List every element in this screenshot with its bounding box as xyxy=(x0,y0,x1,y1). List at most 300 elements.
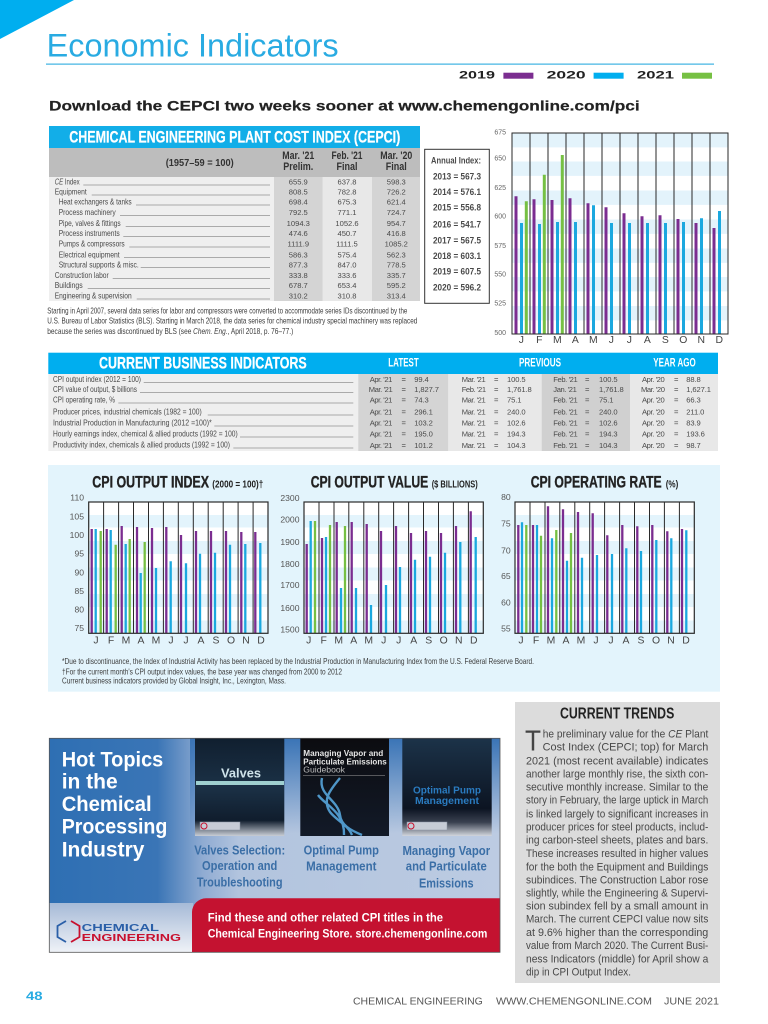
x axis: operating rate: J xyxy=(593,635,599,646)
CEPCI row labels xyxy=(55,176,270,301)
CEPCI Mar 20 values: 562.3 xyxy=(387,250,406,259)
CEPCI y axis: 550 xyxy=(494,272,506,279)
CEPCI Mar 21 values: 1111.9 xyxy=(288,240,309,249)
CBI previous column 2: = xyxy=(585,385,590,394)
corner triangle xyxy=(0,0,74,39)
CBI previous column 1: Mar. '21 xyxy=(462,375,485,384)
CBI previous column 1: 104.3 xyxy=(507,441,526,450)
y axis: output value: 1900 xyxy=(280,537,300,547)
CEPCI Mar 21 values: 586.3 xyxy=(289,250,308,259)
panel: current trends xyxy=(515,702,720,983)
heading: CPI operating rate: (%) xyxy=(666,480,678,491)
book: valves: Valves xyxy=(221,766,261,781)
CBI previous column 2: Feb. '21 xyxy=(553,375,577,384)
CBI previous column 2: Jan. '21 xyxy=(553,385,577,394)
CBI previous column 1: 75.1 xyxy=(507,396,521,405)
x axis: operating rate: N xyxy=(667,635,675,646)
CEPCI Feb 21 values: 771.1 xyxy=(337,208,357,217)
current trends body: ing carbon-steel sheets, plates and bars. xyxy=(526,835,708,847)
CEPCI y axis: 575 xyxy=(494,243,506,250)
CBI previous column 1: = xyxy=(494,396,499,405)
CBI previous column 2: 194.3 xyxy=(599,430,618,439)
y axis: output index: 100 xyxy=(70,530,84,540)
CBI year ago column: Apr. '20 xyxy=(642,418,664,428)
book titles: Operation and xyxy=(202,859,277,873)
CEPCI row labels: CE Index xyxy=(55,176,80,186)
panel: CEPCI table xyxy=(49,126,420,301)
CBI year ago column: 193.6 xyxy=(686,430,705,439)
red store banner: Find these and other related CPI titles in the xyxy=(208,912,444,925)
x axis: output value: J xyxy=(396,635,401,646)
book titles: and Particulate xyxy=(406,860,487,874)
CEPCI Feb 21 values: 782.8 xyxy=(337,187,357,196)
CEPCI heading: CHEMICAL ENGINEERING PLANT COST INDEX (CEPCI) xyxy=(69,128,400,147)
CBI previous column 2: = xyxy=(585,441,590,450)
CBI year ago column: Apr. '20 xyxy=(642,408,664,416)
book titles: Troubleshooting xyxy=(197,876,283,890)
CBI previous column 1: 102.6 xyxy=(507,418,526,428)
y axis: output value: 2000 xyxy=(280,515,300,525)
CBI previous column 1: 240.0 xyxy=(507,408,526,416)
CBI year ago column: = xyxy=(674,396,679,405)
x axis: output value: N xyxy=(455,635,462,646)
CEPCI Mar 21 values: 474.6 xyxy=(289,229,308,238)
book titles: Optimal Pump xyxy=(304,843,379,857)
book: vapor and particulate emissions: Managing Vapor and xyxy=(303,748,383,758)
annual index box: 2016 = 541.7 xyxy=(433,219,481,229)
y axis: output value xyxy=(280,493,300,635)
CBI year ago column: Apr. '20 xyxy=(642,396,664,405)
CEPCI Mar 20 values xyxy=(385,178,408,301)
CBI previous column 2: = xyxy=(585,408,590,416)
ad headline: Hot Topics xyxy=(62,749,163,772)
CEPCI Mar 21 values: 333.8 xyxy=(289,271,308,280)
current trends body: slightly, while the Engineering & Supervi- xyxy=(526,888,709,900)
CEPCI Feb 21 values: 1111.5 xyxy=(336,240,358,249)
CBI latest column: Mar. '21 xyxy=(369,385,392,394)
CBI previous column 1 xyxy=(462,375,532,450)
CEPCI column header xyxy=(49,148,420,177)
CEPCI Mar 21 values xyxy=(287,178,310,301)
chart: CPI operating rate xyxy=(501,473,694,646)
CBI previous column 2 xyxy=(553,375,624,450)
CBI year ago column: = xyxy=(674,375,679,384)
x axis: output index: A xyxy=(138,635,145,646)
CBI year ago column: Mar. '20 xyxy=(641,385,665,394)
CEPCI Mar 21 values: 310.2 xyxy=(289,292,308,301)
CBI year ago column: 211.0 xyxy=(686,408,704,416)
CBI previous column 1: = xyxy=(494,385,499,394)
CEPCI Feb 21 values: 450.7 xyxy=(337,229,357,238)
x axis: output value: D xyxy=(470,635,477,646)
current trends body: producer prices for steel products, includ- xyxy=(526,821,709,833)
CBI year ago column: = xyxy=(674,441,679,450)
CBI year ago column: Apr. '20 xyxy=(642,441,664,450)
CEPCI x axis: J xyxy=(609,335,614,346)
CBI heading: CURRENT BUSINESS INDICATORS xyxy=(99,353,307,372)
y axis: output index: 80 xyxy=(74,605,84,615)
CBI year ago column: 66.3 xyxy=(686,396,701,405)
CBI year ago column xyxy=(641,375,711,450)
CBI latest column: 1,827.7 xyxy=(414,385,439,394)
CEPCI x axis: O xyxy=(679,335,687,346)
y axis: output value: 2300 xyxy=(280,493,300,503)
y axis: output value: 1700 xyxy=(280,580,300,590)
CEPCI row labels: Construction labor xyxy=(55,270,109,280)
CBI previous column 1: = xyxy=(494,441,499,450)
current trends body: value from March 2020. The Current Busi- xyxy=(526,940,709,952)
annual index box: 2015 = 556.8 xyxy=(433,203,481,213)
CEPCI y axis xyxy=(494,130,506,337)
current trends body xyxy=(526,729,709,978)
CBI previous column 2: 1,761.8 xyxy=(599,385,624,394)
CEPCI x axis: N xyxy=(698,335,705,346)
current trends body: ness Indicators (middle) for April show a xyxy=(526,953,708,965)
CEPCI column header: Final xyxy=(336,161,358,173)
CBI row labels xyxy=(53,374,353,449)
CBI heading: YEAR AGO xyxy=(653,358,696,370)
CBI latest column: Apr. '21 xyxy=(370,396,392,405)
x axis: output index: D xyxy=(257,635,265,646)
CEPCI column header: Feb. '21 xyxy=(332,150,362,162)
CEPCI Feb 21 values xyxy=(335,178,359,301)
CBI latest column: = xyxy=(402,441,406,450)
ad headline: Industry xyxy=(62,839,145,862)
CEPCI column header: Mar. '20 xyxy=(380,150,412,162)
CBI previous column 1: 100.5 xyxy=(507,375,526,384)
CBI latest column: = xyxy=(402,396,406,405)
x axis: output index: M xyxy=(122,635,130,646)
CBI previous column 1: Mar. '21 xyxy=(462,396,485,405)
CBI row labels: Productivity index, chemicals & allied products (1992 = 100) xyxy=(53,439,230,449)
CEPCI row labels: Heat exchangers & tanks xyxy=(59,196,132,206)
CEPCI row labels: Structural supports & misc. xyxy=(59,259,139,269)
CEPCI y axis: 675 xyxy=(494,130,506,136)
CBI previous column 1: 194.3 xyxy=(507,430,526,439)
CBI previous column 2: 240.0 xyxy=(599,408,618,416)
CEPCI Feb 21 values: 575.4 xyxy=(337,250,357,259)
chart: CPI output value xyxy=(280,473,483,646)
CEPCI y axis: 600 xyxy=(494,214,506,221)
heading: CPI output index: CPI OUTPUT INDEX xyxy=(92,473,209,492)
book: vapor and particulate emissions xyxy=(300,738,389,836)
Chemical Engineering logo xyxy=(58,921,181,944)
CEPCI Mar 21 values: 877.3 xyxy=(289,260,308,269)
annual index box: 2019 = 607.5 xyxy=(433,267,481,277)
CBI latest column xyxy=(369,375,439,450)
CEPCI row labels: Process instruments xyxy=(59,228,120,238)
x axis: output value xyxy=(306,635,477,646)
CEPCI footnote: because the series was discontinued by BLS (see Chem. Eng., April 2018, p. 76–77.) xyxy=(47,327,294,336)
y axis: output index: 95 xyxy=(74,549,84,559)
y axis: output value: 1500 xyxy=(280,625,300,635)
CEPCI Mar 20 values: 416.8 xyxy=(387,229,406,238)
x axis: output index: O xyxy=(227,635,235,646)
CEPCI x axis: F xyxy=(536,335,542,346)
CBI latest column: 99.4 xyxy=(414,375,429,384)
x axis: operating rate: J xyxy=(518,635,524,646)
y axis: output value: 1600 xyxy=(280,603,300,613)
Chemical Engineering logo: CHEMICAL xyxy=(82,923,159,934)
CBI previous column 2: 100.5 xyxy=(599,375,618,384)
CBI row labels: Industrial Production in Manufacturing (2012 =100)* xyxy=(53,418,212,428)
x axis: output index: J xyxy=(168,635,174,646)
CEPCI column header: Final xyxy=(386,161,407,173)
CEPCI Mar 20 values: 778.5 xyxy=(387,260,406,269)
title: Economic Indicators xyxy=(47,28,339,64)
panel: advertisement xyxy=(49,738,500,952)
x axis: operating rate: M xyxy=(547,635,555,646)
CEPCI Mar 20 values: 954.7 xyxy=(387,219,406,228)
CBI year ago column: = xyxy=(674,418,679,428)
current trends body: secutive monthly increase. Similar to the xyxy=(526,782,708,794)
CBI year ago column: 83.9 xyxy=(686,418,701,428)
panel: current business indicators xyxy=(48,353,718,451)
CEPCI x axis: D xyxy=(716,335,723,346)
CBI latest column: 101.2 xyxy=(414,441,433,450)
CEPCI Feb 21 values: 637.8 xyxy=(337,178,357,186)
CBI previous column 1: Mar. '21 xyxy=(462,418,485,428)
CBI latest column: Apr. '21 xyxy=(370,430,392,439)
current trends body: he preliminary value for the CE Plant xyxy=(543,729,708,741)
footer: WWW.CHEMENGONLINE.COM xyxy=(496,995,652,1007)
ad headline: Chemical xyxy=(62,793,152,816)
footer: JUNE 2021 xyxy=(664,995,719,1007)
CEPCI Mar 20 values: 621.4 xyxy=(387,198,406,206)
CEPCI y axis: 500 xyxy=(494,330,506,337)
CEPCI Mar 20 values: 1085.2 xyxy=(385,240,408,249)
ad headline xyxy=(62,749,167,862)
CBI previous column 2: Feb. '21 xyxy=(553,396,577,405)
x axis: operating rate: A xyxy=(623,635,630,646)
CBI previous column 1: = xyxy=(494,430,499,439)
CBI heading xyxy=(48,353,718,374)
annual index box: 2017 = 567.5 xyxy=(433,235,481,245)
x axis: output value: A xyxy=(410,635,417,646)
CBI previous column 2: = xyxy=(585,418,590,428)
y axis: output index xyxy=(70,493,84,633)
CBI previous column 2: Feb. '21 xyxy=(553,408,577,416)
legend: 2020 xyxy=(547,69,586,81)
CEPCI x axis: M xyxy=(553,335,562,346)
CBI previous column 1: Mar. '21 xyxy=(462,441,485,450)
book titles: Management xyxy=(306,860,377,874)
CEPCI bar chart xyxy=(494,130,728,346)
current trends body: story in February, the large uptick in March xyxy=(526,795,708,807)
x axis: output index: N xyxy=(242,635,250,646)
current trends body: for the both the Equipment and Buildings xyxy=(526,861,708,873)
x axis: output index: S xyxy=(213,635,220,646)
x axis: operating rate: F xyxy=(533,635,539,646)
CEPCI Mar 21 values: 792.5 xyxy=(289,208,308,217)
CEPCI row labels: Engineering & supervision xyxy=(55,291,132,301)
y axis: operating rate: 65 xyxy=(501,571,511,581)
CBI heading: PREVIOUS xyxy=(519,358,561,370)
book titles: Managing Vapor xyxy=(402,844,490,858)
CBI year ago column: = xyxy=(674,408,679,416)
CEPCI footnote: U.S. Bureau of Labor Statistics (BLS). Starting in March 2018, the data series for chemical industry special machinery was replaced xyxy=(47,317,418,326)
CEPCI Feb 21 values: 847.0 xyxy=(337,260,357,269)
footer: CHEMICAL ENGINEERING xyxy=(353,995,483,1007)
x axis: output value: A xyxy=(350,635,357,646)
CEPCI Mar 21 values: 655.9 xyxy=(289,178,308,186)
CEPCI Mar 21 values: 698.4 xyxy=(289,198,308,206)
CBI latest column: 74.3 xyxy=(414,396,429,405)
CBI previous column 1: 1,761.8 xyxy=(507,385,532,394)
CBI previous column 2: 104.3 xyxy=(599,441,618,450)
current trends body: at 9.6% higher than the corresponding xyxy=(526,927,708,939)
CBI latest column: 296.1 xyxy=(414,408,433,416)
CEPCI Feb 21 values: 1052.6 xyxy=(335,219,359,228)
y axis: output index: 105 xyxy=(70,511,84,521)
x axis: output value: J xyxy=(381,635,386,646)
CBI previous column 2: = xyxy=(585,430,590,439)
x axis: operating rate: O xyxy=(652,635,660,646)
CBI heading: LATEST xyxy=(388,358,419,370)
y axis: operating rate: 75 xyxy=(501,519,511,529)
CEPCI Mar 20 values: 313.4 xyxy=(387,292,406,301)
CEPCI row labels: Process machinery xyxy=(59,207,116,217)
CBI latest column: Apr. '21 xyxy=(370,441,392,450)
heading: CPI output value: CPI OUTPUT VALUE xyxy=(311,473,428,492)
current trends body: These increases resulted in higher values xyxy=(526,848,708,860)
ad headline: Processing xyxy=(62,815,167,838)
CEPCI row labels: Equipment xyxy=(55,186,87,196)
heading: CPI output value: ($ BILLIONS) xyxy=(432,480,478,491)
download notice: Download the CEPCI two weeks sooner at www.chemengonline.com/pci xyxy=(49,99,640,114)
x axis: operating rate: S xyxy=(638,635,645,646)
current trends body: dip in CPI Output Index. xyxy=(526,966,631,978)
chart footnotes: †For the current month's CPI output index values, the base year was changed from 2000 to 2012 xyxy=(62,667,342,676)
legend xyxy=(459,69,712,81)
CEPCI column header: Prelim. xyxy=(283,161,313,173)
CBI year ago column: Apr. '20 xyxy=(642,430,664,439)
CBI latest column: = xyxy=(402,385,406,394)
CBI row labels: CPI output index (2012 = 100) xyxy=(53,374,141,384)
CEPCI footnote: Starting in April 2007, several data series for labor and compressors were converted to accommodate series IDs discontinued by the xyxy=(47,307,408,316)
CBI row labels: Producer prices, industrial chemicals (1982 = 100) xyxy=(53,406,202,416)
CEPCI row labels: Buildings xyxy=(55,280,83,290)
CBI year ago column: = xyxy=(674,385,679,394)
CBI previous column 2: Feb. '21 xyxy=(553,441,577,450)
y axis: operating rate xyxy=(501,492,511,634)
CEPCI Mar 20 values: 726.2 xyxy=(387,187,406,196)
x axis: operating rate xyxy=(518,635,690,646)
CEPCI x axis: J xyxy=(627,335,632,346)
CBI previous column 2: = xyxy=(585,396,590,405)
y axis: output index: 110 xyxy=(70,493,84,503)
drop cap: T xyxy=(525,726,541,758)
CBI latest column: Apr. '21 xyxy=(370,418,392,428)
chart footnotes: Current business indicators provided by Global Insight, Inc., Lexington, Mass. xyxy=(62,676,286,685)
CEPCI y axis: 525 xyxy=(494,301,506,308)
CBI previous column 1: = xyxy=(494,375,499,384)
CEPCI Feb 21 values: 675.3 xyxy=(337,198,357,206)
red store banner: Chemical Engineering Store. store.chemengonline.com xyxy=(208,927,487,940)
CBI previous column 1: Feb. '21 xyxy=(462,385,486,394)
CEPCI Feb 21 values: 653.4 xyxy=(337,281,357,290)
CBI row labels: CPI value of output, $ billions xyxy=(53,384,137,394)
ad headline: in the xyxy=(62,770,118,793)
annual index box: 2014 = 576.1 xyxy=(433,187,481,197)
CEPCI Mar 20 values: 595.2 xyxy=(387,281,406,290)
CBI previous column 1: = xyxy=(494,408,499,416)
CBI latest column: 195.0 xyxy=(414,430,433,439)
x axis: operating rate: D xyxy=(682,635,690,646)
CBI latest column: = xyxy=(402,430,406,439)
CEPCI x axis xyxy=(519,335,723,346)
CEPCI Mar 20 values: 724.7 xyxy=(387,208,406,217)
CEPCI row labels: Electrical equipment xyxy=(59,249,120,259)
CEPCI x axis: A xyxy=(572,335,579,346)
CEPCI Mar 21 values: 808.5 xyxy=(289,187,308,196)
CBI latest column: = xyxy=(402,418,406,428)
x axis: output value: S xyxy=(425,635,432,646)
CEPCI x axis: J xyxy=(519,335,524,346)
annual index box: 2018 = 603.1 xyxy=(433,251,481,261)
CBI previous column 2: Feb. '21 xyxy=(553,430,577,439)
CEPCI Mar 20 values: 335.7 xyxy=(387,271,406,280)
CEPCI x axis: M xyxy=(589,335,598,346)
CBI latest column: Apr. '21 xyxy=(370,375,392,384)
y axis: operating rate: 55 xyxy=(501,624,511,634)
CBI year ago column: 1,627.1 xyxy=(686,385,711,394)
annual index box: 2013 = 567.3 xyxy=(433,171,481,181)
book: optimal pump management xyxy=(402,738,492,836)
book titles: Valves Selection: xyxy=(194,843,285,857)
CEPCI Feb 21 values: 333.6 xyxy=(337,271,357,280)
CEPCI Mar 21 values: 678.7 xyxy=(289,281,308,290)
x axis: operating rate: J xyxy=(608,635,614,646)
book titles xyxy=(194,843,490,890)
CBI row labels: Hourly earnings index, chemical & allied products (1992 = 100) xyxy=(53,428,238,438)
CEPCI heading xyxy=(49,126,420,148)
CEPCI Mar 20 values: 598.3 xyxy=(387,178,406,186)
CBI year ago column: 98.7 xyxy=(686,441,701,450)
CBI year ago column: Apr. '20 xyxy=(642,375,664,384)
y axis: output index: 75 xyxy=(74,623,84,633)
x axis: operating rate: A xyxy=(563,635,570,646)
x axis: output index: J xyxy=(93,635,99,646)
annual index box xyxy=(425,149,489,303)
chart footnotes xyxy=(62,657,534,685)
CBI previous column 1: Mar. '21 xyxy=(462,430,485,439)
CBI row labels: CPI operating rate, % xyxy=(53,394,115,404)
CEPCI x axis: S xyxy=(662,335,669,346)
CBI latest column: = xyxy=(402,408,406,416)
CBI year ago column: 88.8 xyxy=(686,375,701,384)
CBI previous column 1: = xyxy=(494,418,499,428)
current trends body: Cost Index (CEPCI; top) for March xyxy=(543,742,708,754)
book: optimal pump management: Management xyxy=(415,796,480,807)
current trends body: 2021 (most recent available) indicates xyxy=(526,755,708,767)
CEPCI Mar 21 values: 1094.3 xyxy=(287,219,310,228)
CBI previous column 2: Feb. '21 xyxy=(553,418,577,428)
footer xyxy=(353,995,719,1007)
legend: 2021 xyxy=(637,69,674,81)
x axis: output index: F xyxy=(108,635,114,646)
x axis: output value: J xyxy=(306,635,311,646)
CBI previous column 1: Mar. '21 xyxy=(462,408,485,416)
annual index box: 2020 = 596.2 xyxy=(433,282,481,292)
x axis: output value: M xyxy=(334,635,343,646)
CEPCI y axis: 625 xyxy=(494,185,506,192)
CBI year ago column: = xyxy=(674,430,679,439)
current trends body: sion subindex fell by a small amount in xyxy=(526,901,708,913)
CBI latest column: Apr. '21 xyxy=(370,408,392,416)
current trends heading: CURRENT TRENDS xyxy=(560,705,675,722)
current trends body: March. The current CEPCI value now sits xyxy=(526,914,708,926)
